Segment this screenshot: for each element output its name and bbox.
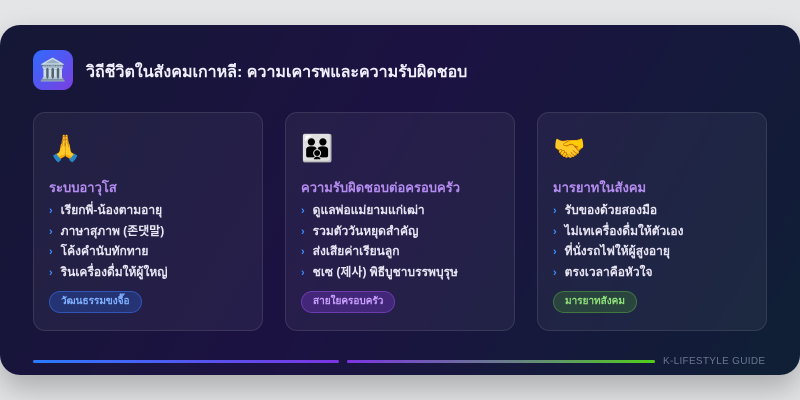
- header icon: 🏛️: [39, 57, 67, 82]
- heading: ความรับผิดชอบต่อครอบครัว: [301, 180, 460, 195]
- list: › เรียกพี่-น้องตามอายุ: [49, 203, 162, 217]
- footer label: K-LIFESTYLE GUIDE: [663, 356, 765, 367]
- heading: ระบบอาวุโส: [49, 180, 117, 195]
- list: › โค้งคำนับทักทาย: [49, 244, 148, 258]
- heading: มารยาทในสังคม: [553, 180, 646, 195]
- header icon: [33, 50, 73, 90]
- list: › ตรงเวลาคือหัวใจ: [553, 264, 652, 278]
- list: › ที่นั่งรถไฟให้ผู้สูงอายุ: [553, 244, 670, 258]
- list: › ดูแลพ่อแม่ยามแก่เฒ่า: [301, 203, 425, 217]
- list: › รวมตัววันหยุดสำคัญ: [301, 224, 418, 238]
- tag: มารยาทสังคม: [565, 296, 625, 307]
- panel: etiquette: [537, 112, 767, 331]
- tag: วัฒนธรรมขงจื๊อ: [61, 296, 130, 307]
- list: › ชเซ (제사) พิธีบูชาบรรพบุรุษ: [301, 264, 458, 278]
- list: › ภาษาสุภาพ (존댓말): [49, 224, 164, 238]
- tag: [553, 291, 637, 313]
- list: › ส่งเสียค่าเรียนลูก: [301, 244, 399, 258]
- list: [301, 203, 458, 280]
- tag: สายใยครอบครัว: [313, 296, 383, 307]
- icon: family: 👪: [301, 133, 333, 163]
- list: [49, 201, 167, 280]
- tag: [49, 291, 142, 313]
- icon: handshake: 🤝: [553, 133, 585, 163]
- list: [553, 203, 683, 278]
- list: › ไม่เทเครื่องดื่มให้ตัวเอง: [553, 224, 683, 238]
- title: วิถีชีวิตในสังคมเกาหลี: ความเคารพและความรับผิดชอบ: [86, 64, 467, 81]
- panel: seniority: [33, 112, 263, 331]
- icon: praying hands: 🙏: [49, 133, 81, 163]
- list: › รับของด้วยสองมือ: [553, 203, 657, 217]
- panel: family: [285, 112, 515, 331]
- list: › รินเครื่องดื่มให้ผู้ใหญ่: [49, 264, 167, 278]
- tag: [301, 291, 395, 313]
